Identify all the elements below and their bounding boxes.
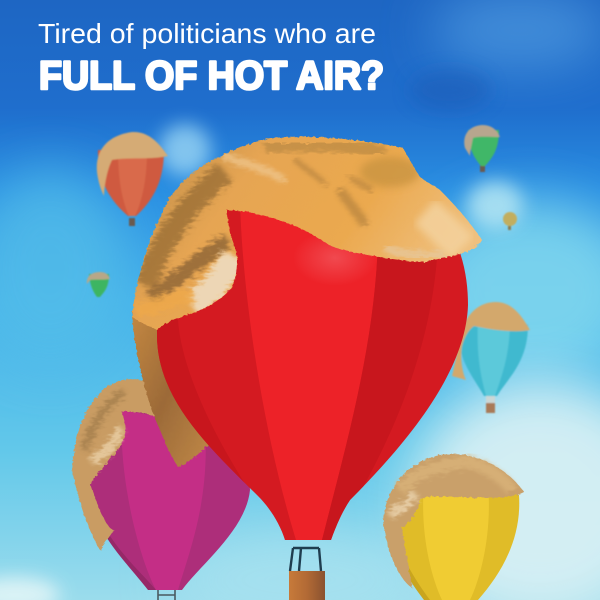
title [38, 18, 384, 98]
balloon: small orange [97, 132, 168, 226]
title line two: FULL OF HOT AIR? [39, 54, 384, 98]
envelope [157, 196, 468, 540]
balloon: pink [72, 379, 250, 600]
balloon: teal [452, 302, 530, 413]
right panel [322, 257, 436, 540]
basket ropes [290, 548, 321, 571]
basket [289, 548, 325, 600]
basket body [289, 571, 325, 600]
balloon: yellow [383, 454, 524, 600]
hair strand behind red balloon [132, 300, 213, 467]
title line one: Tired of politicians who are [38, 18, 376, 49]
balloon: small green left [87, 272, 110, 297]
highlight [302, 239, 368, 280]
far left panel [157, 319, 285, 540]
balloon: small olive [503, 212, 517, 230]
red balloon [140, 196, 468, 540]
centre panel [240, 200, 378, 540]
toupee hair on red balloon [132, 137, 482, 330]
balloon: small green top right [464, 125, 500, 172]
hair shading [145, 172, 225, 285]
pink balloon ropes and basket [158, 590, 175, 600]
